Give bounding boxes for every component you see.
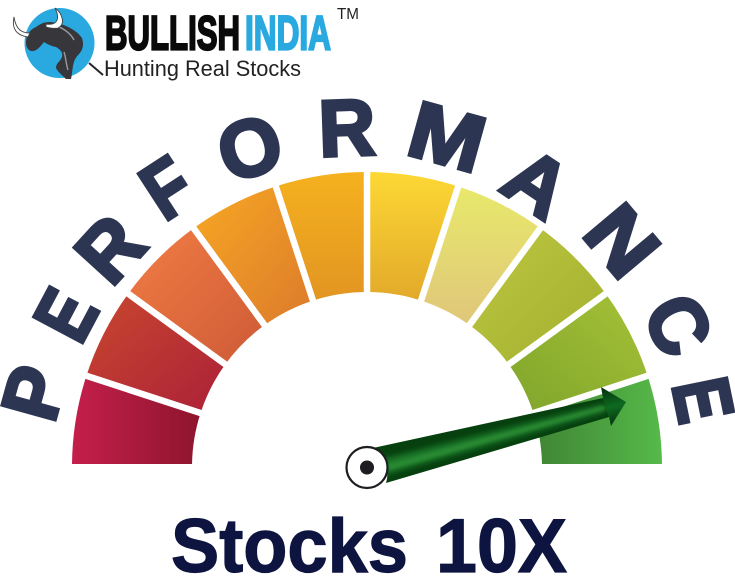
segment 6 [367,172,458,301]
logo wordmark: INDIA: INDIA [245,8,331,60]
arrow shaft [373,398,609,483]
heading: PERFORMANCE [0,82,735,430]
gauge arc [72,165,662,467]
segment 10 [540,378,662,464]
segment 7 [421,186,540,325]
heading: PERFORMANCE: O [207,96,293,200]
heading: PERFORMANCE: N [567,187,677,294]
heading: PERFORMANCE: C [625,279,731,371]
segment 4 [194,186,313,325]
segment 3 [128,228,264,364]
logo tagline: Hunting Real Stocks [104,56,301,81]
caption: Stocks 10X [171,504,567,588]
segment 8 [470,228,606,364]
icon: blue circle [24,8,94,78]
arrow head [601,387,626,426]
caption: Stocks 10X: 10X [436,504,567,588]
heading: PERFORMANCE: F [125,138,209,237]
logo wordmark: BULLISH: BULLISH [105,8,240,60]
heading: PERFORMANCE: M [399,84,495,190]
needle hub [346,447,388,488]
heading: PERFORMANCE: E [17,275,116,355]
logo: Bullish India [13,6,359,81]
icon: charging bull [13,8,103,79]
segment 1 [72,376,201,467]
heading: PERFORMANCE: R [58,198,162,300]
segment 2 [86,294,225,413]
hub dot [360,460,374,474]
caption: Stocks 10X: Stocks [171,504,408,588]
needle arrow [346,387,626,488]
heading: PERFORMANCE: R [317,82,377,174]
trademark: TM [337,6,359,23]
segment 5 [276,172,367,301]
segment 9 [509,294,648,413]
heading: PERFORMANCE: A [487,130,586,237]
